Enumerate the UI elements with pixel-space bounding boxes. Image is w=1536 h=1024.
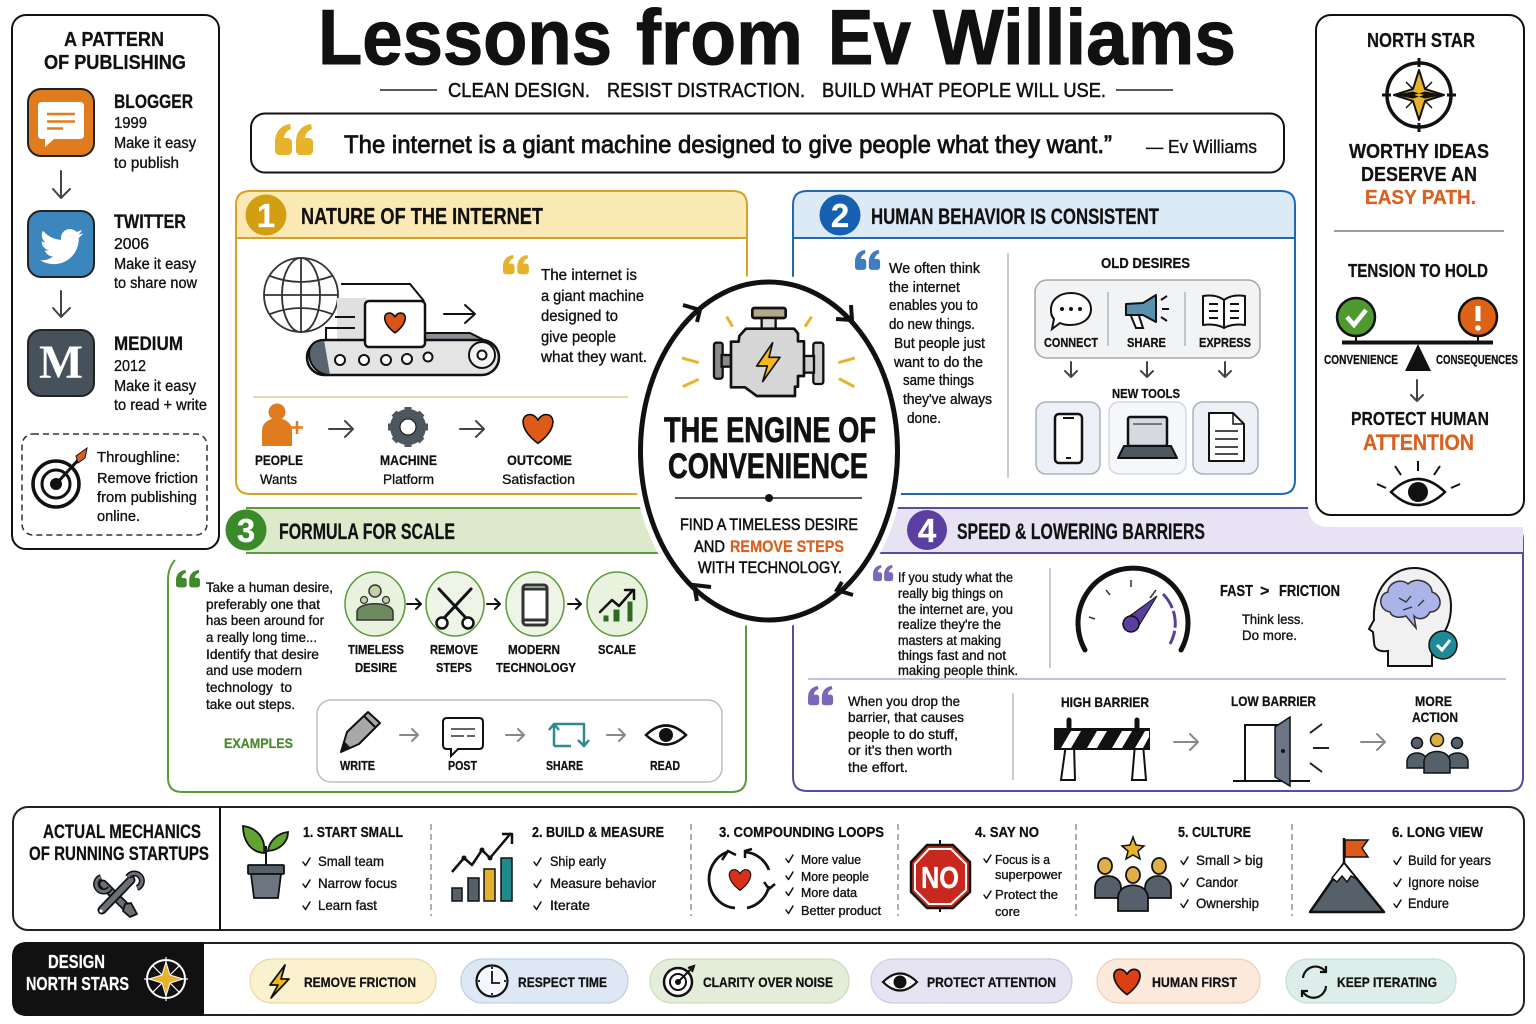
high barrier bbox=[1054, 694, 1150, 780]
pull quote 3 bbox=[176, 570, 333, 712]
tagline: REMOVE STEPS bbox=[730, 537, 844, 556]
pill: protect attention: PROTECT ATTENTION bbox=[927, 974, 1056, 990]
pull quote 4b: people to do stuff, bbox=[848, 726, 958, 742]
flow: machine bbox=[380, 407, 437, 487]
item 4: say no bbox=[911, 824, 1063, 919]
heading: the engine of convenience: CONVENIENCE bbox=[668, 447, 868, 486]
more action: ACTION bbox=[1412, 709, 1458, 725]
item 3: compounding loops: More data bbox=[801, 885, 858, 900]
subtitle: CLEAN DESIGN. bbox=[448, 80, 590, 102]
item 3: compounding loops: Better product bbox=[801, 903, 881, 918]
pull quote 3: technology to bbox=[206, 679, 292, 695]
callout: throughline: from publishing bbox=[97, 489, 197, 506]
statement: worthy ideas bbox=[1349, 141, 1489, 209]
icon: express book: EXPRESS bbox=[1199, 335, 1251, 350]
pill: remove friction: REMOVE FRICTION bbox=[304, 974, 416, 990]
step: modern technology: MODERN bbox=[508, 642, 560, 657]
icon: post: POST bbox=[448, 759, 477, 773]
pill: remove friction bbox=[250, 959, 436, 1003]
heading: speed and lowering barriers: SPEED & LOWERING BARRIERS bbox=[957, 519, 1205, 544]
step: modern technology bbox=[496, 572, 576, 675]
item 4: say no: superpower bbox=[995, 867, 1063, 882]
arrow bbox=[1174, 734, 1198, 750]
heading: actual mechanics: OF RUNNING STARTUPS bbox=[29, 844, 209, 865]
item 1: start small: Learn fast bbox=[318, 897, 377, 913]
pull quote 4b bbox=[808, 686, 964, 775]
arrow bbox=[506, 729, 524, 741]
icon: balance scale bbox=[1324, 298, 1518, 371]
heading: a pattern of publishing: A PATTERN bbox=[64, 29, 164, 51]
item 3: compounding loops: More value bbox=[801, 852, 861, 867]
pull quote 4a: masters at making bbox=[898, 633, 1001, 648]
pull quote 2: But people just bbox=[894, 336, 985, 352]
panel 3: formula for scale bbox=[168, 508, 746, 792]
pull quote 2: the internet bbox=[889, 280, 960, 296]
pill: clarity over noise: CLARITY OVER NOISE bbox=[703, 974, 833, 990]
pull quote 4a: making people think. bbox=[898, 663, 1018, 678]
pull quote 4b: or it's then worth bbox=[848, 742, 952, 758]
icon: share megaphone bbox=[1126, 295, 1169, 350]
item 3: compounding loops: More people bbox=[801, 869, 869, 884]
item 2: build and measure bbox=[452, 824, 664, 913]
flow: people bbox=[255, 404, 303, 487]
statement: protect human attention: PROTECT HUMAN bbox=[1351, 409, 1489, 429]
heading: the engine of convenience: THE ENGINE OF bbox=[664, 411, 876, 450]
icon: head and brain bbox=[1369, 568, 1457, 666]
step: scale: SCALE bbox=[598, 642, 636, 657]
item 1: start small: Narrow focus bbox=[318, 875, 397, 891]
old desires group bbox=[1035, 256, 1260, 358]
text: twitter bbox=[114, 212, 198, 292]
pill: respect time: RESPECT TIME bbox=[518, 974, 607, 990]
pull quote 2: enables you to bbox=[889, 298, 978, 314]
icon: read eye bbox=[646, 726, 686, 773]
arrow bbox=[407, 599, 421, 609]
icon: twitter bbox=[28, 211, 94, 277]
item 2: build and measure: 2. BUILD & MEASURE bbox=[532, 824, 664, 841]
item 1: start small: Small team bbox=[318, 853, 384, 869]
text: twitter: TWITTER bbox=[114, 212, 186, 233]
flow: outcome: Satisfaction bbox=[502, 471, 575, 487]
item 1: start small: 1. START SMALL bbox=[303, 824, 403, 841]
step: remove steps bbox=[426, 572, 484, 675]
item 6: long view: Ignore noise bbox=[1408, 874, 1479, 890]
text: medium: 2012 bbox=[114, 358, 146, 375]
text: fast over friction: FRICTION bbox=[1279, 583, 1340, 600]
pull quote 3: Identify that desire bbox=[206, 646, 319, 662]
pill: human first bbox=[1097, 959, 1260, 1003]
pull quote 3: a really long time... bbox=[206, 629, 317, 645]
item 2: build and measure: Iterate bbox=[550, 897, 590, 913]
tagline: FIND A TIMELESS DESIRE bbox=[680, 515, 858, 534]
low barrier bbox=[1231, 693, 1329, 786]
pull quote 4a: realize they're the bbox=[898, 617, 1001, 632]
pull quote 3: preferably one that bbox=[206, 596, 320, 612]
icon: phone bbox=[1055, 414, 1082, 463]
icon: laptop bbox=[1118, 417, 1177, 458]
pull quote 1: The internet is bbox=[541, 267, 637, 284]
step: timeless desire: TIMELESS bbox=[348, 642, 404, 657]
badge 1 bbox=[246, 194, 286, 236]
more action: MORE bbox=[1415, 693, 1452, 709]
icon: eye bbox=[1377, 461, 1460, 505]
pull quote 1: a giant machine bbox=[541, 288, 644, 305]
item 1: start small bbox=[243, 824, 403, 913]
icon: read eye: READ bbox=[650, 759, 680, 773]
arrow: down bbox=[1411, 380, 1423, 401]
item 4: say no: NO bbox=[921, 860, 959, 895]
pull quote 3: Take a human desire, bbox=[206, 579, 333, 595]
text: twitter: Make it easy bbox=[114, 256, 196, 273]
item 4: say no: Protect the bbox=[995, 887, 1058, 902]
heading: the engine of convenience bbox=[664, 411, 876, 486]
heading: actual mechanics bbox=[29, 822, 209, 865]
panel: north star bbox=[1308, 12, 1536, 527]
pill: keep iterating bbox=[1286, 959, 1456, 1003]
text: blogger: to publish bbox=[114, 155, 179, 172]
heading: a pattern of publishing bbox=[44, 29, 186, 74]
icon: crossed wrenches bbox=[96, 873, 142, 917]
item 6: long view: 6. LONG VIEW bbox=[1392, 824, 1484, 841]
low barrier: LOW BARRIER bbox=[1231, 693, 1316, 709]
icon: connect: CONNECT bbox=[1044, 335, 1098, 350]
pull quote 3: take out steps. bbox=[206, 696, 295, 712]
text: blogger: 1999 bbox=[114, 115, 147, 132]
pull quote 4a: If you study what the bbox=[898, 570, 1013, 585]
pill: respect time bbox=[461, 959, 628, 1003]
pull quote 1: what they want. bbox=[540, 349, 647, 366]
icon: white compass bbox=[144, 957, 188, 1001]
text: blogger: Make it easy bbox=[114, 135, 196, 152]
step: remove steps: REMOVE bbox=[430, 642, 478, 657]
quote banner bbox=[251, 114, 1284, 172]
arrow bbox=[607, 729, 625, 741]
icon: share megaphone: SHARE bbox=[1127, 335, 1166, 350]
flow: machine: MACHINE bbox=[380, 452, 437, 468]
icon: pencil: WRITE bbox=[340, 759, 375, 773]
pull quote 2 bbox=[855, 250, 992, 427]
arrow: people to machine bbox=[329, 421, 353, 437]
title bbox=[318, 0, 1236, 81]
badge 3: 3 bbox=[237, 512, 255, 549]
heading: design north stars: NORTH STARS bbox=[26, 974, 129, 994]
callout: throughline: Remove friction bbox=[97, 470, 198, 487]
item 5: culture: Candor bbox=[1196, 874, 1238, 890]
flow: outcome bbox=[502, 415, 575, 487]
icon: share bbox=[546, 724, 589, 773]
icon: medium: M bbox=[39, 336, 83, 389]
pull quote 4b: When you drop the bbox=[848, 693, 960, 709]
step: modern technology: TECHNOLOGY bbox=[496, 660, 576, 675]
arrow: twitter to medium bbox=[53, 291, 70, 317]
center: engine of convenience bbox=[633, 274, 905, 628]
statement: protect human attention: ATTENTION bbox=[1363, 430, 1474, 455]
heading: a pattern of publishing: OF PUBLISHING bbox=[44, 52, 186, 74]
tagline: AND bbox=[694, 537, 725, 556]
pill: human first: HUMAN FIRST bbox=[1152, 974, 1237, 990]
statement: worthy ideas: WORTHY IDEAS bbox=[1349, 141, 1489, 163]
text: medium: MEDIUM bbox=[114, 334, 183, 355]
item 5: culture: Small > big bbox=[1196, 852, 1263, 868]
text: fast over friction: Think less. bbox=[1242, 611, 1304, 627]
item 6: long view bbox=[1310, 824, 1491, 912]
new tools group bbox=[1036, 386, 1258, 474]
item 5: culture bbox=[1095, 824, 1263, 911]
quote banner: — Ev Williams bbox=[1146, 137, 1257, 157]
pull quote 2: want to do the bbox=[893, 355, 983, 371]
item 4: say no: Focus is a bbox=[995, 852, 1051, 867]
panel 2: human behavior is consistent bbox=[793, 191, 1295, 494]
icon: blogger bbox=[28, 89, 94, 156]
item 2: build and measure: Measure behavior bbox=[550, 875, 656, 891]
pull quote 1: designed to bbox=[541, 308, 618, 325]
text: fast over friction bbox=[1220, 583, 1340, 643]
arrow bbox=[487, 599, 500, 609]
pill: keep iterating: KEEP ITERATING bbox=[1337, 974, 1437, 990]
icon: connect bbox=[1044, 293, 1098, 350]
icon: engine bbox=[682, 308, 855, 396]
step: scale bbox=[587, 572, 647, 657]
step: timeless desire bbox=[345, 572, 405, 675]
item 4: say no: 4. SAY NO bbox=[975, 824, 1039, 841]
heading: human behavior is consistent: HUMAN BEHAVIOR IS CONSISTENT bbox=[871, 204, 1159, 229]
panel: actual mechanics of running startups bbox=[13, 807, 1524, 930]
text: fast over friction: Do more. bbox=[1242, 627, 1297, 643]
item 3: compounding loops bbox=[709, 824, 884, 918]
text: medium: to read + write bbox=[114, 397, 207, 414]
badge 4: 4 bbox=[918, 512, 937, 549]
cycle arrowheads bbox=[683, 305, 853, 601]
text: twitter: 2006 bbox=[114, 236, 149, 253]
item 4: say no: core bbox=[995, 904, 1020, 919]
pull quote 4a bbox=[873, 565, 1018, 678]
subtitle bbox=[380, 80, 1173, 102]
badge 2 bbox=[820, 194, 860, 236]
heading: formula for scale: FORMULA FOR SCALE bbox=[279, 519, 455, 544]
statement: protect human attention bbox=[1351, 409, 1489, 455]
pull quote 2: same things bbox=[903, 373, 974, 389]
icon: pencil bbox=[340, 712, 380, 773]
step: timeless desire: DESIRE bbox=[355, 660, 397, 675]
text: fast over friction: FAST bbox=[1220, 583, 1253, 600]
item 6: long view: Build for years bbox=[1408, 852, 1491, 868]
callout: throughline: Throughline: bbox=[97, 449, 180, 466]
callout: throughline bbox=[22, 434, 207, 535]
pull quote 2: We often think bbox=[889, 261, 981, 277]
new tools group: NEW TOOLS bbox=[1112, 386, 1180, 401]
badge 4 bbox=[907, 510, 947, 550]
pull quote 4a: things fast and not bbox=[898, 648, 1006, 663]
panel 1: nature of the internet bbox=[236, 191, 747, 494]
icon: speedometer bbox=[1078, 568, 1188, 650]
panel: design north stars bbox=[12, 942, 1524, 1016]
flow: people: PEOPLE bbox=[255, 452, 303, 468]
flow: outcome: OUTCOME bbox=[507, 452, 572, 468]
flow: people: Wants bbox=[260, 471, 297, 487]
pull quote 2: done. bbox=[907, 411, 941, 427]
step: remove steps: STEPS bbox=[436, 660, 472, 675]
flow: machine: Platform bbox=[383, 471, 434, 487]
badge 2: 2 bbox=[831, 197, 849, 234]
pull quote 4a: the internet are, you bbox=[898, 602, 1013, 617]
tagline: WITH TECHNOLOGY. bbox=[698, 558, 842, 577]
heading: north star: NORTH STAR bbox=[1367, 30, 1475, 52]
statement: worthy ideas: DESERVE AN bbox=[1361, 164, 1477, 186]
icon: share: SHARE bbox=[546, 759, 583, 773]
old desires group: OLD DESIRES bbox=[1101, 256, 1190, 272]
text: blogger: BLOGGER bbox=[114, 92, 193, 113]
panel: a pattern of publishing bbox=[12, 15, 219, 549]
label: examples: EXAMPLES bbox=[224, 735, 293, 751]
quote banner: The internet is a giant machine designed to give people what they want.” bbox=[344, 131, 1112, 159]
text: medium bbox=[114, 334, 207, 414]
pull quote 2: do new things. bbox=[889, 317, 975, 333]
pill: clarity over noise bbox=[650, 959, 849, 1003]
arrow bbox=[1361, 734, 1385, 750]
examples box bbox=[317, 700, 722, 782]
pull quote 2: they've always bbox=[903, 392, 992, 408]
arrow bbox=[400, 729, 418, 741]
icon: post bbox=[443, 718, 483, 773]
icon: express book bbox=[1199, 295, 1251, 350]
pull quote 4b: barrier, that causes bbox=[848, 709, 964, 725]
text: blogger bbox=[114, 92, 196, 172]
panel 4: speed and lowering barriers bbox=[793, 508, 1523, 791]
high barrier: HIGH BARRIER bbox=[1061, 694, 1149, 710]
item 3: compounding loops: 3. COMPOUNDING LOOPS bbox=[719, 824, 884, 841]
pull quote 3: has been around for bbox=[206, 612, 324, 628]
icon: document bbox=[1209, 413, 1244, 461]
badge 1: 1 bbox=[257, 197, 275, 234]
pull quote 3: and use modern bbox=[206, 662, 302, 678]
tagline bbox=[680, 515, 858, 577]
pull quote 4a: really big things on bbox=[898, 586, 1003, 601]
icon: compass bbox=[1382, 58, 1456, 132]
heading: design north stars: DESIGN bbox=[48, 952, 105, 972]
statement: worthy ideas: EASY PATH. bbox=[1365, 187, 1476, 209]
text: fast over friction: > bbox=[1260, 583, 1269, 600]
heading: actual mechanics: ACTUAL MECHANICS bbox=[43, 822, 201, 843]
pull quote 1: give people bbox=[541, 329, 616, 346]
item 6: long view: Endure bbox=[1408, 895, 1449, 911]
heading: design north stars bbox=[26, 952, 129, 994]
pull quote 4b: the effort. bbox=[848, 759, 908, 775]
badge 3 bbox=[226, 510, 266, 550]
arrow: blogger to twitter bbox=[53, 171, 70, 198]
more action bbox=[1407, 693, 1468, 773]
subtitle: BUILD WHAT PEOPLE WILL USE. bbox=[822, 80, 1106, 102]
text: medium: Make it easy bbox=[114, 378, 196, 395]
heading: nature of the internet: NATURE OF THE INTERNET bbox=[301, 203, 543, 229]
pill: protect attention bbox=[871, 959, 1072, 1003]
heading: tension to hold: TENSION TO HOLD bbox=[1348, 261, 1488, 281]
arrow bbox=[568, 599, 581, 609]
icon: balance scale: CONVENIENCE bbox=[1324, 353, 1398, 367]
item 2: build and measure: Ship early bbox=[550, 853, 606, 869]
arrow: machine to outcome bbox=[460, 421, 484, 437]
arrows: old desires to new tools bbox=[1065, 362, 1231, 377]
pull quote 1 bbox=[503, 255, 647, 366]
item 5: culture: Ownership bbox=[1196, 895, 1259, 911]
subtitle: RESIST DISTRACTION. bbox=[607, 80, 805, 102]
callout: throughline: online. bbox=[97, 508, 140, 525]
icon: medium bbox=[28, 330, 94, 396]
text: twitter: to share now bbox=[114, 275, 198, 292]
illustration: globe and machine bbox=[264, 258, 499, 375]
item 5: culture: 5. CULTURE bbox=[1178, 824, 1251, 841]
